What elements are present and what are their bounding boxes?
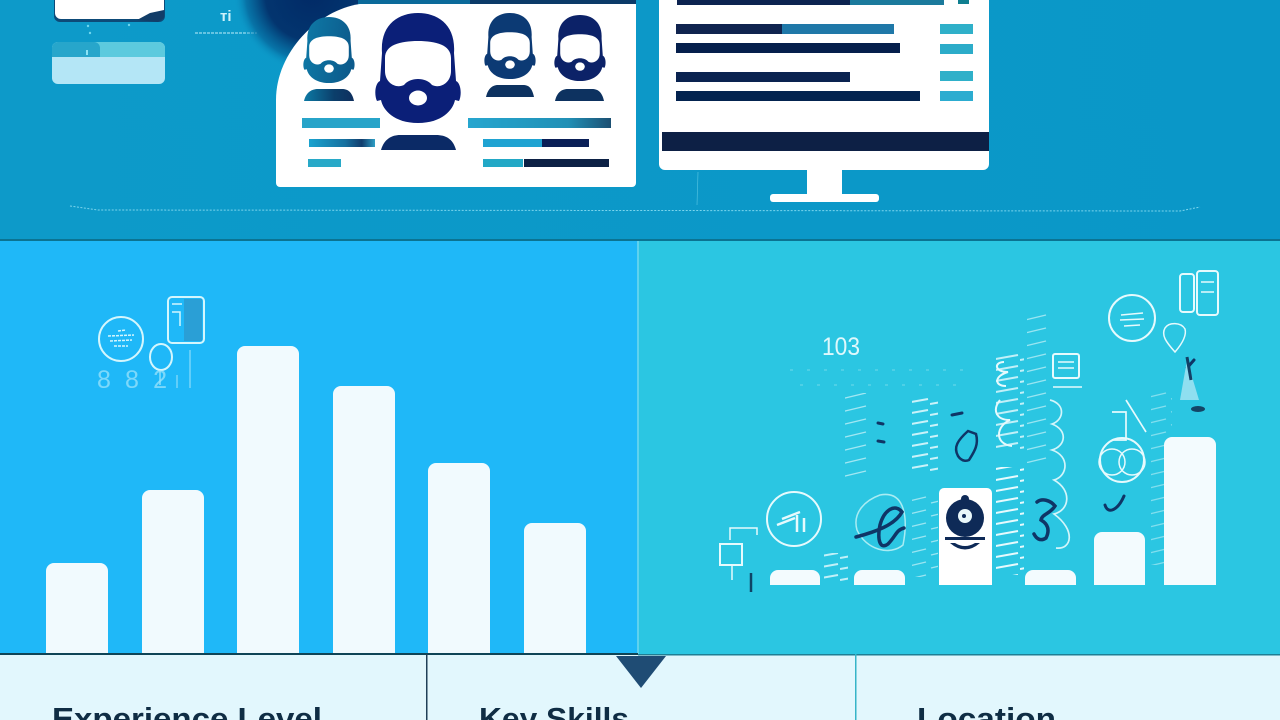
icon: small box [720,528,757,592]
icon: profile face large [375,13,461,150]
panel: small cards top left [52,0,165,84]
icon: small tick label [195,8,257,33]
profile detail bars left [302,118,380,167]
icon: dark squiggle knot [856,508,904,546]
panel: monitor list [659,0,989,202]
icon: profile face three [484,13,536,97]
icon: circle chart bottom [767,492,821,546]
icon: tree cluster [1099,400,1146,482]
icon: dark three [1034,500,1055,540]
profile detail bars right [468,118,611,167]
monitor row four [676,71,973,82]
bar chart: experience level [46,346,586,654]
panel: experience chart background [0,241,638,654]
panel: skills chart background [637,241,1280,654]
icon: pen on top right [1180,357,1205,412]
icon: circle chat top [1109,295,1155,341]
icons: dark scribbles [856,360,1194,546]
icon: dark oval [956,431,977,461]
icon: documents [1180,271,1218,315]
monitor row one [677,0,969,5]
dotted baseline [70,172,1200,211]
top banner background [0,0,1280,241]
digit marks: 8 8 2 [97,366,167,394]
icon: balloon pin [150,344,172,385]
card shadow [228,0,358,75]
icon: chat circle [99,317,143,361]
faint scribble row [790,370,970,385]
scribbled number label: 103 [822,333,860,361]
monitor row three [676,43,973,54]
icon: profile face one [303,17,355,101]
arrow: down pointer [616,656,666,688]
icon: dark teardrop marks [878,360,1194,510]
panel: bottom information strip [0,653,1280,720]
hatched scribble columns [824,313,1172,583]
monitor row two [676,24,973,34]
icon: squiggle column [1050,400,1069,548]
icons: skills chart annotations [720,271,1218,592]
monitor row five [676,91,973,101]
icon: outlined globe [856,494,905,550]
icon: keypad [1053,354,1082,387]
icon: profile face four [554,15,606,101]
panel: candidate profiles card [276,0,636,187]
icon: curled glyph [996,362,1012,446]
icon: pin [1164,324,1185,352]
icons: experience chart annotations [97,297,204,394]
icon: document [168,297,204,343]
icon: small tick label: ті [220,8,232,25]
icon: speaker on highlighted bar [945,495,985,550]
bar chart: key skills [770,437,1216,585]
